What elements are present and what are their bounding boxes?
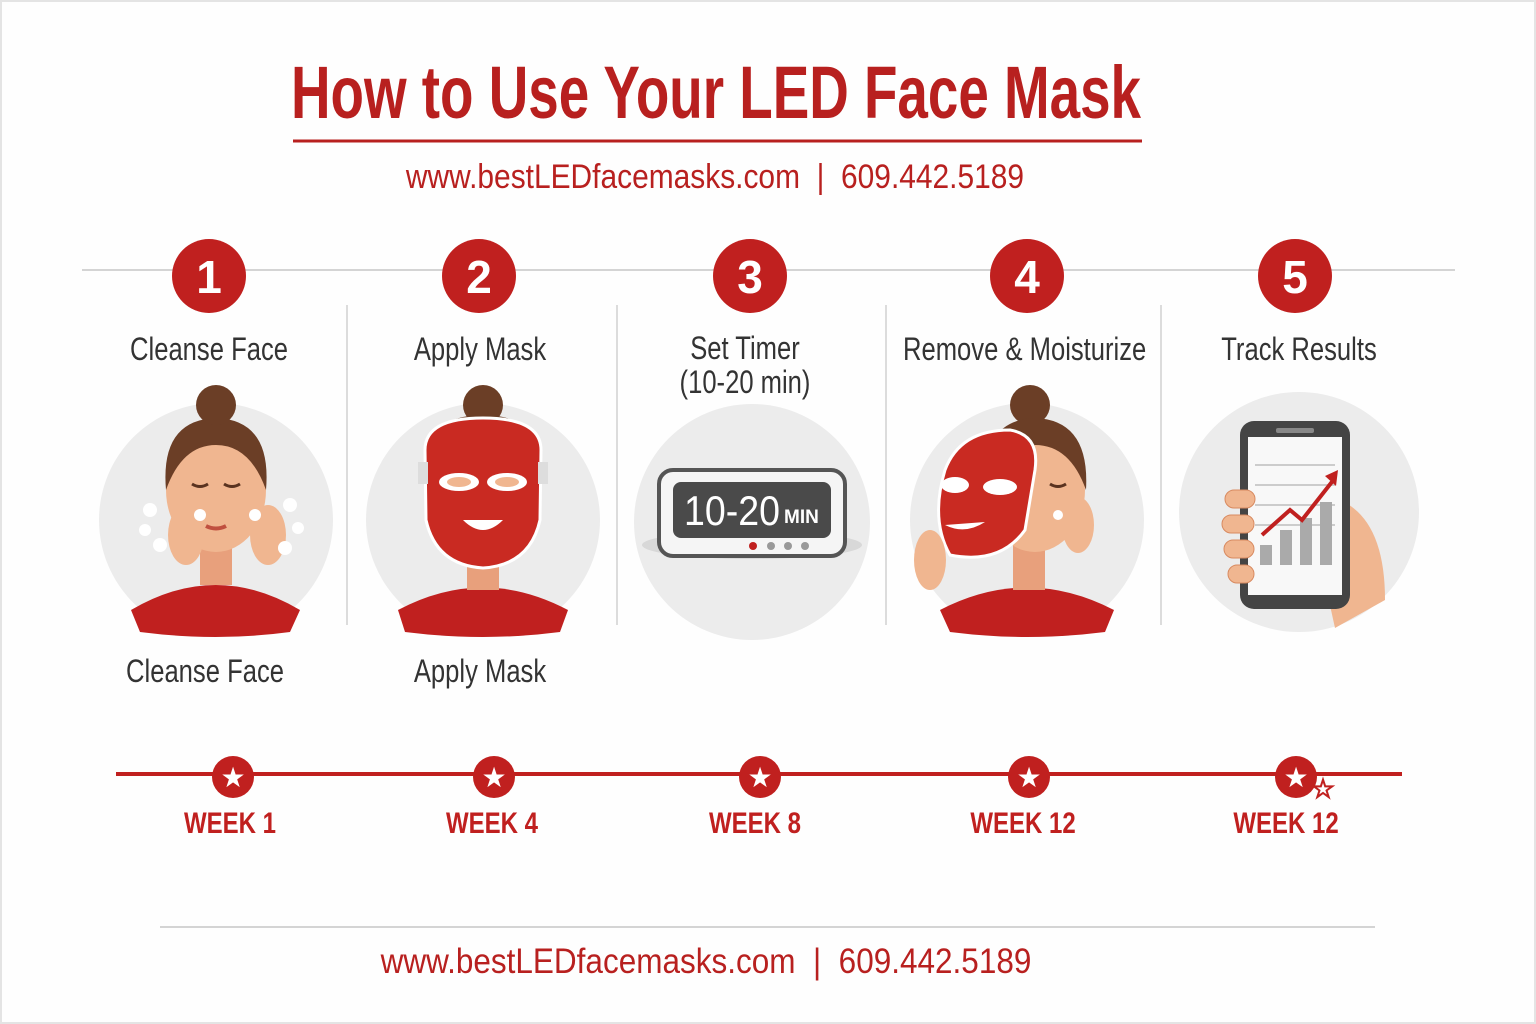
illustration: timer: MIN — [784, 507, 819, 528]
step labels: Cleanse Face — [130, 331, 288, 367]
step labels: Apply Mask — [414, 331, 546, 367]
title: How to Use Your LED Face Mask — [291, 51, 1141, 134]
illustration: track results phone — [1179, 392, 1419, 632]
step 5 number — [1258, 239, 1332, 313]
step labels — [130, 330, 1377, 400]
timeline: ★ — [1016, 761, 1042, 794]
step 2 number: 2 — [466, 251, 492, 303]
timeline: ★ — [1312, 775, 1334, 803]
bottom caption labels: Apply Mask — [414, 653, 546, 689]
step 4 number — [990, 239, 1064, 313]
step labels: Set Timer — [690, 330, 800, 366]
step 5 number: 5 — [1282, 251, 1308, 303]
week labels: WEEK 8 — [709, 807, 801, 840]
step 1 number — [172, 239, 246, 313]
step 3 number — [713, 239, 787, 313]
timeline: ★ — [481, 761, 507, 794]
subtitle contact: www.bestLEDfacemasks.com | 609.442.5189 — [406, 158, 1024, 196]
illustration: timer: 10-20 — [684, 487, 780, 534]
step 3 number: 3 — [737, 251, 763, 303]
week labels: WEEK 12 — [970, 807, 1076, 840]
week labels: WEEK 4 — [446, 807, 538, 840]
illustration: apply mask — [366, 385, 600, 637]
step labels: Track Results — [1221, 331, 1377, 367]
step 4 number: 4 — [1014, 251, 1040, 303]
bottom caption labels — [126, 653, 546, 689]
step 2 number — [442, 239, 516, 313]
step 1 number: 1 — [196, 251, 222, 303]
footer contact: www.bestLEDfacemasks.com | 609.442.5189 — [381, 942, 1031, 981]
step labels: Remove & Moisturize — [903, 331, 1146, 367]
timeline: ★ — [747, 761, 773, 794]
timeline: ★ — [1283, 761, 1309, 794]
week labels: WEEK 12 — [1233, 807, 1339, 840]
illustration: remove and moisturize — [910, 385, 1144, 637]
step labels: (10-20 min) — [680, 364, 810, 400]
illustration: cleanse face — [99, 385, 333, 637]
bottom caption labels: Cleanse Face — [126, 653, 284, 689]
week labels: WEEK 1 — [184, 807, 276, 840]
timeline: ★ — [220, 761, 246, 794]
week labels — [184, 807, 1339, 840]
illustration: timer — [634, 404, 870, 640]
